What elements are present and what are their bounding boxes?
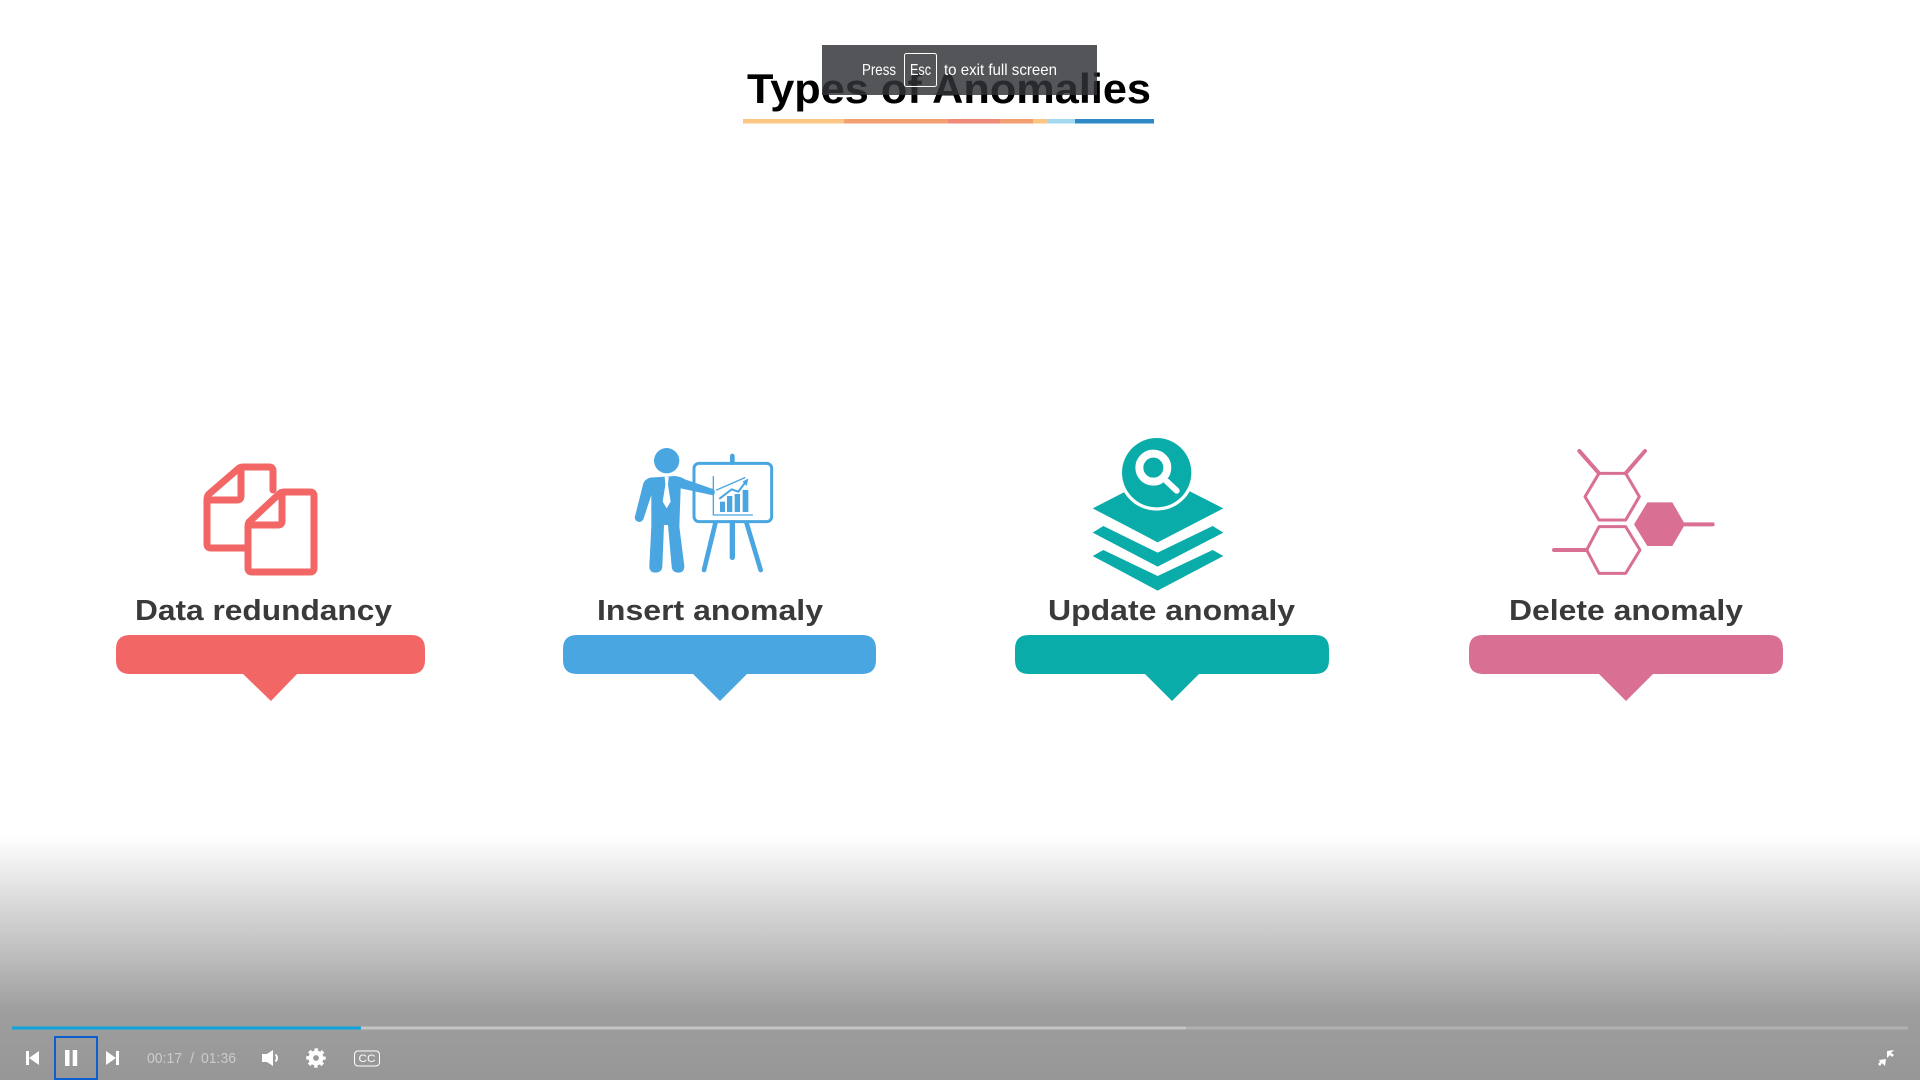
label: insert anomaly: Insert anomaly [597, 595, 823, 627]
icon: settings gear [308, 1050, 324, 1066]
icon: hexagon molecule [1554, 451, 1713, 573]
icon: previous [26, 1051, 39, 1065]
panel: data redundancy [116, 467, 425, 701]
pause button focus [55, 1037, 97, 1079]
callout bar: insert anomaly [563, 635, 876, 701]
panel: delete anomaly [1469, 451, 1783, 701]
callout bar: data redundancy [116, 635, 425, 701]
full screen notice [822, 45, 1097, 95]
player controls [26, 1037, 1894, 1079]
time readout: 00:17 [147, 1050, 182, 1067]
icon: duplicate documents [207, 467, 314, 572]
icon: volume [262, 1050, 277, 1066]
callout bar: update anomaly [1015, 635, 1329, 701]
full screen notice: to exit full screen [944, 62, 1057, 79]
time readout: / [190, 1050, 195, 1067]
icon: exit fullscreen [1878, 1050, 1894, 1066]
icon: closed captions [354, 1051, 380, 1066]
progress bar [12, 1026, 1908, 1030]
full screen notice: Esc [910, 62, 931, 79]
time readout [147, 1050, 236, 1067]
time readout: 01:36 [201, 1050, 236, 1067]
panel: insert anomaly [563, 448, 876, 701]
label: delete anomaly: Delete anomaly [1509, 595, 1743, 627]
icon: next [106, 1051, 119, 1065]
title: Types of Anomalies [747, 65, 1151, 112]
label: data redundancy: Data redundancy [135, 595, 392, 627]
player gradient overlay [0, 835, 1920, 1080]
full screen notice: Press [862, 62, 896, 79]
label: update anomaly: Update anomaly [1048, 595, 1295, 627]
icon: presenter at chart board [635, 448, 772, 573]
title underline [743, 119, 1154, 124]
panel: update anomaly [1015, 435, 1329, 701]
callout bar: delete anomaly [1469, 635, 1783, 701]
icon: closed captions: CC [358, 1053, 376, 1065]
icon: layers with magnifier [1093, 435, 1223, 591]
